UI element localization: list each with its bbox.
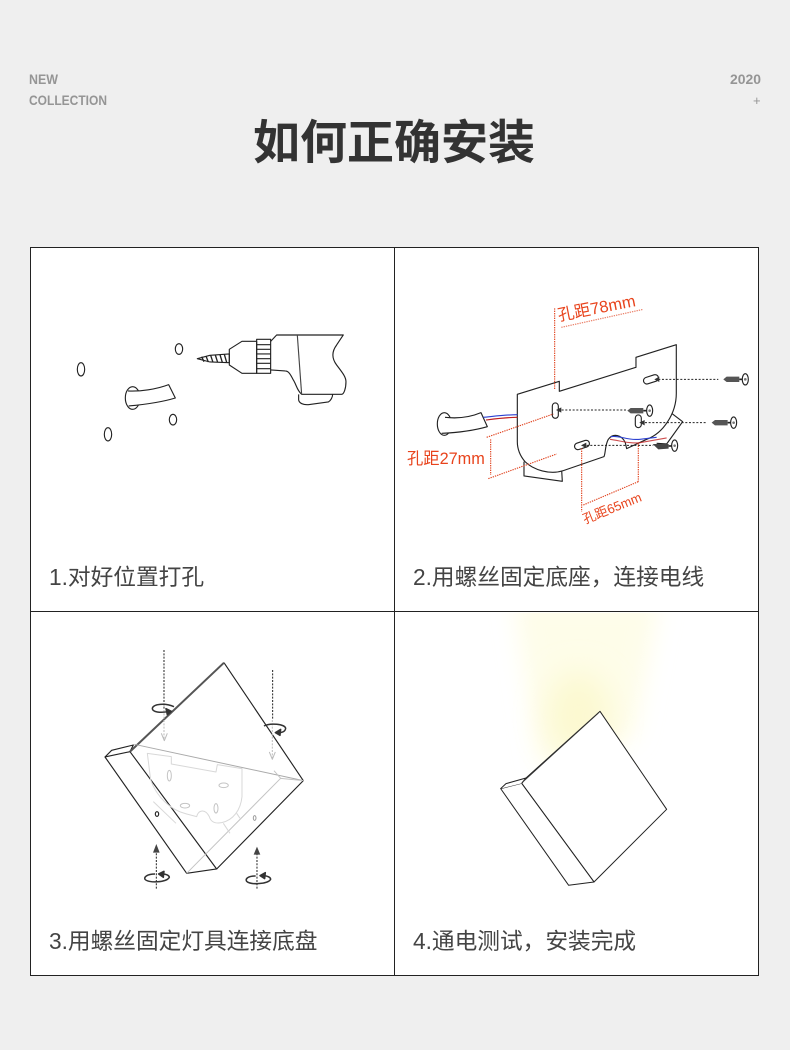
- header label: new collection: NEW: [29, 71, 59, 87]
- icon: screws: [627, 374, 748, 451]
- illustration: powered lamp with glow: [501, 599, 667, 885]
- header label: year: [730, 71, 761, 108]
- header label: year: 2020: [730, 71, 761, 87]
- icon: wall pipe with wires: [437, 413, 667, 443]
- dimension label: 78mm: 孔距78mm: [556, 291, 637, 325]
- icon: lamp body: [105, 663, 303, 873]
- icon: screw hole: [155, 812, 159, 816]
- dimension lines: [487, 308, 643, 512]
- step 2 label: 2.用螺丝固定底座，连接电线: [413, 564, 704, 590]
- dimension label: 27mm: 孔距27mm: [407, 450, 485, 468]
- step 1 label: 1.对好位置打孔: [49, 564, 204, 590]
- header label: new collection: COLLECTION: [29, 92, 107, 108]
- dashed guides: [562, 379, 718, 445]
- header label: year: +: [753, 93, 761, 108]
- icon: electric drill: [197, 335, 346, 405]
- icon: slots: [552, 374, 659, 451]
- light glow: [514, 612, 659, 764]
- arrows: top dashed: [161, 650, 275, 759]
- illustration: fix lamp to base: [105, 650, 303, 890]
- title: 如何正确安装: [253, 116, 535, 169]
- icon: wall brackets behind plate: [524, 413, 683, 481]
- header label: new collection: [29, 71, 107, 108]
- icons: rotation arrows: [145, 704, 286, 884]
- step 4 label: 4.通电测试，安装完成: [413, 928, 636, 954]
- step 3 label: 3.用螺丝固定灯具连接底盘: [49, 928, 317, 954]
- icon: translucent interior: [134, 744, 303, 873]
- panel grid: [30, 248, 758, 976]
- icon: wall pipe: [125, 385, 175, 409]
- illustration: drilling holes: [77, 335, 346, 441]
- icon: base plate: [517, 345, 676, 472]
- illustration: mounting base plate: [437, 308, 748, 512]
- dimension label: 65mm: 孔距65mm: [581, 490, 644, 527]
- arrow heads: [556, 377, 659, 448]
- icon: drill holes: [77, 344, 183, 441]
- icon: lamp body: [501, 711, 667, 885]
- arrows: bottom dashed: [153, 844, 260, 890]
